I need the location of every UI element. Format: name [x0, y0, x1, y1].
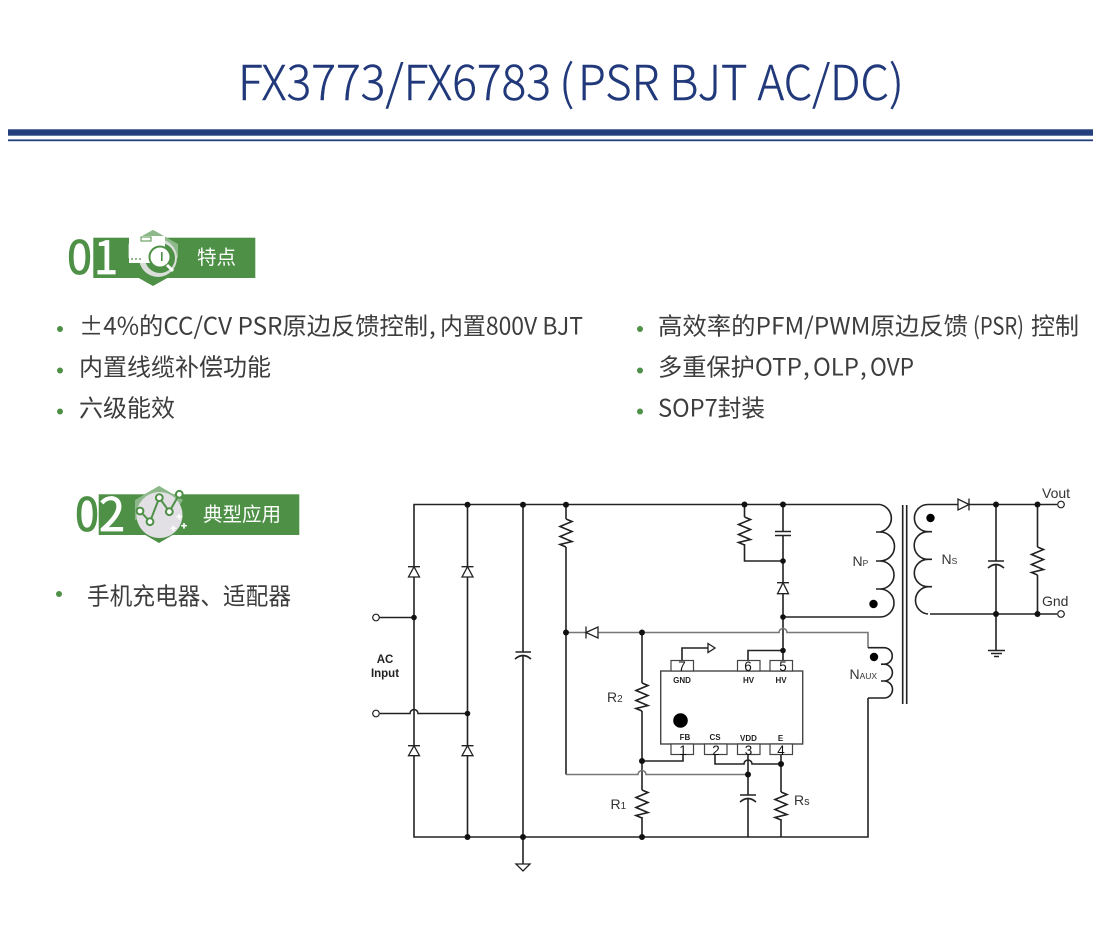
ground symbols [516, 650, 1005, 871]
title: FX3773/FX6783 [238, 44, 551, 114]
IC chip: 4 [777, 743, 785, 758]
section badge 01: features [67, 222, 255, 288]
arrow: GND pin [708, 644, 715, 652]
feature list: left column: 内置线缆补偿功能 [79, 348, 271, 382]
badge label: 特点 [197, 247, 236, 269]
output terminals and labels: Vout [1042, 485, 1070, 501]
IC chip: HV [775, 676, 787, 685]
capacitors [515, 532, 1004, 802]
output terminals and labels: Gnd [1042, 593, 1068, 609]
feature list: right column: OLP [813, 348, 859, 382]
AC input terminals and label [371, 614, 399, 717]
IC chip: 6 [744, 659, 752, 674]
feature list: right column: 多重保护OTP [658, 348, 802, 382]
AC input terminals and label: AC [377, 654, 393, 666]
auxiliary winding NAUX: NAUX [850, 666, 877, 682]
IC chip: GND [673, 676, 691, 685]
feature list: right column: OVP [870, 348, 914, 382]
IC chip: HV [743, 676, 755, 685]
component labels: R2 [607, 689, 623, 705]
feature list: right column: , [803, 348, 810, 382]
auxiliary winding NAUX [850, 648, 892, 698]
icon: line chart [135, 486, 187, 543]
junction dots [411, 502, 1040, 840]
secondary winding NS [914, 504, 958, 614]
badge label: 典型应用 [203, 504, 281, 526]
component labels: R1 [610, 796, 627, 812]
feature list: right column: 高效率的PFM/PWM原边反馈 [658, 306, 968, 342]
feature list: right column [637, 306, 1079, 424]
IC chip: 3 [745, 743, 752, 758]
primary winding NP: NP [852, 553, 869, 569]
feature list: left column: ±4%的CC/CV PSR原边反馈控制 [79, 306, 428, 342]
badge number 02: 0 [75, 479, 99, 545]
title [238, 44, 904, 114]
application list: 手机充电器、适配器 [87, 576, 291, 612]
feature list: left column: 六级能效 [79, 388, 175, 424]
output terminals and labels [1042, 485, 1070, 617]
IC chip: CS [709, 733, 721, 742]
feature list: left column: , [429, 306, 436, 342]
transformer core [903, 505, 907, 704]
badge number 02 [75, 479, 125, 545]
secondary winding NS: NS [942, 551, 958, 567]
feature list: right column: SOP7封装 [658, 388, 765, 424]
IC chip: VDD [740, 734, 757, 743]
badge number 01: 0 [67, 222, 92, 288]
badge number 02: 2 [99, 479, 125, 545]
icon: parcel and magnifier [128, 230, 178, 286]
IC chip [661, 659, 803, 758]
feature list: right column: , [860, 348, 867, 382]
badge number 01 [67, 222, 118, 288]
AC input terminals and label: Input [371, 668, 399, 680]
IC chip: 5 [779, 659, 787, 674]
circuit schematic [371, 485, 1070, 871]
main wiring [376, 504, 1057, 864]
title: PSR BJT AC/DC [578, 44, 889, 114]
feature list: right column: 控制 [1031, 306, 1079, 342]
IC chip: E [778, 734, 784, 743]
feature list: right column: (PSR) [973, 306, 1024, 342]
title: ) [889, 44, 904, 114]
IC chip: 2 [712, 743, 720, 758]
component labels: Rs [794, 792, 810, 808]
component labels [607, 689, 810, 812]
header rule [8, 129, 1093, 141]
IC chip: FB [680, 733, 691, 742]
IC chip: 1 [679, 743, 687, 758]
IC chip: 7 [678, 659, 686, 674]
primary winding NP [852, 504, 894, 617]
feature list: left column: 内置800V BJT [440, 306, 583, 342]
diodes [408, 498, 969, 756]
section badge 02: typical application [75, 479, 299, 545]
title: ( [559, 44, 574, 114]
feature list: left column [57, 306, 583, 424]
resistors [560, 517, 1044, 820]
badge number 01: 1 [94, 222, 118, 288]
